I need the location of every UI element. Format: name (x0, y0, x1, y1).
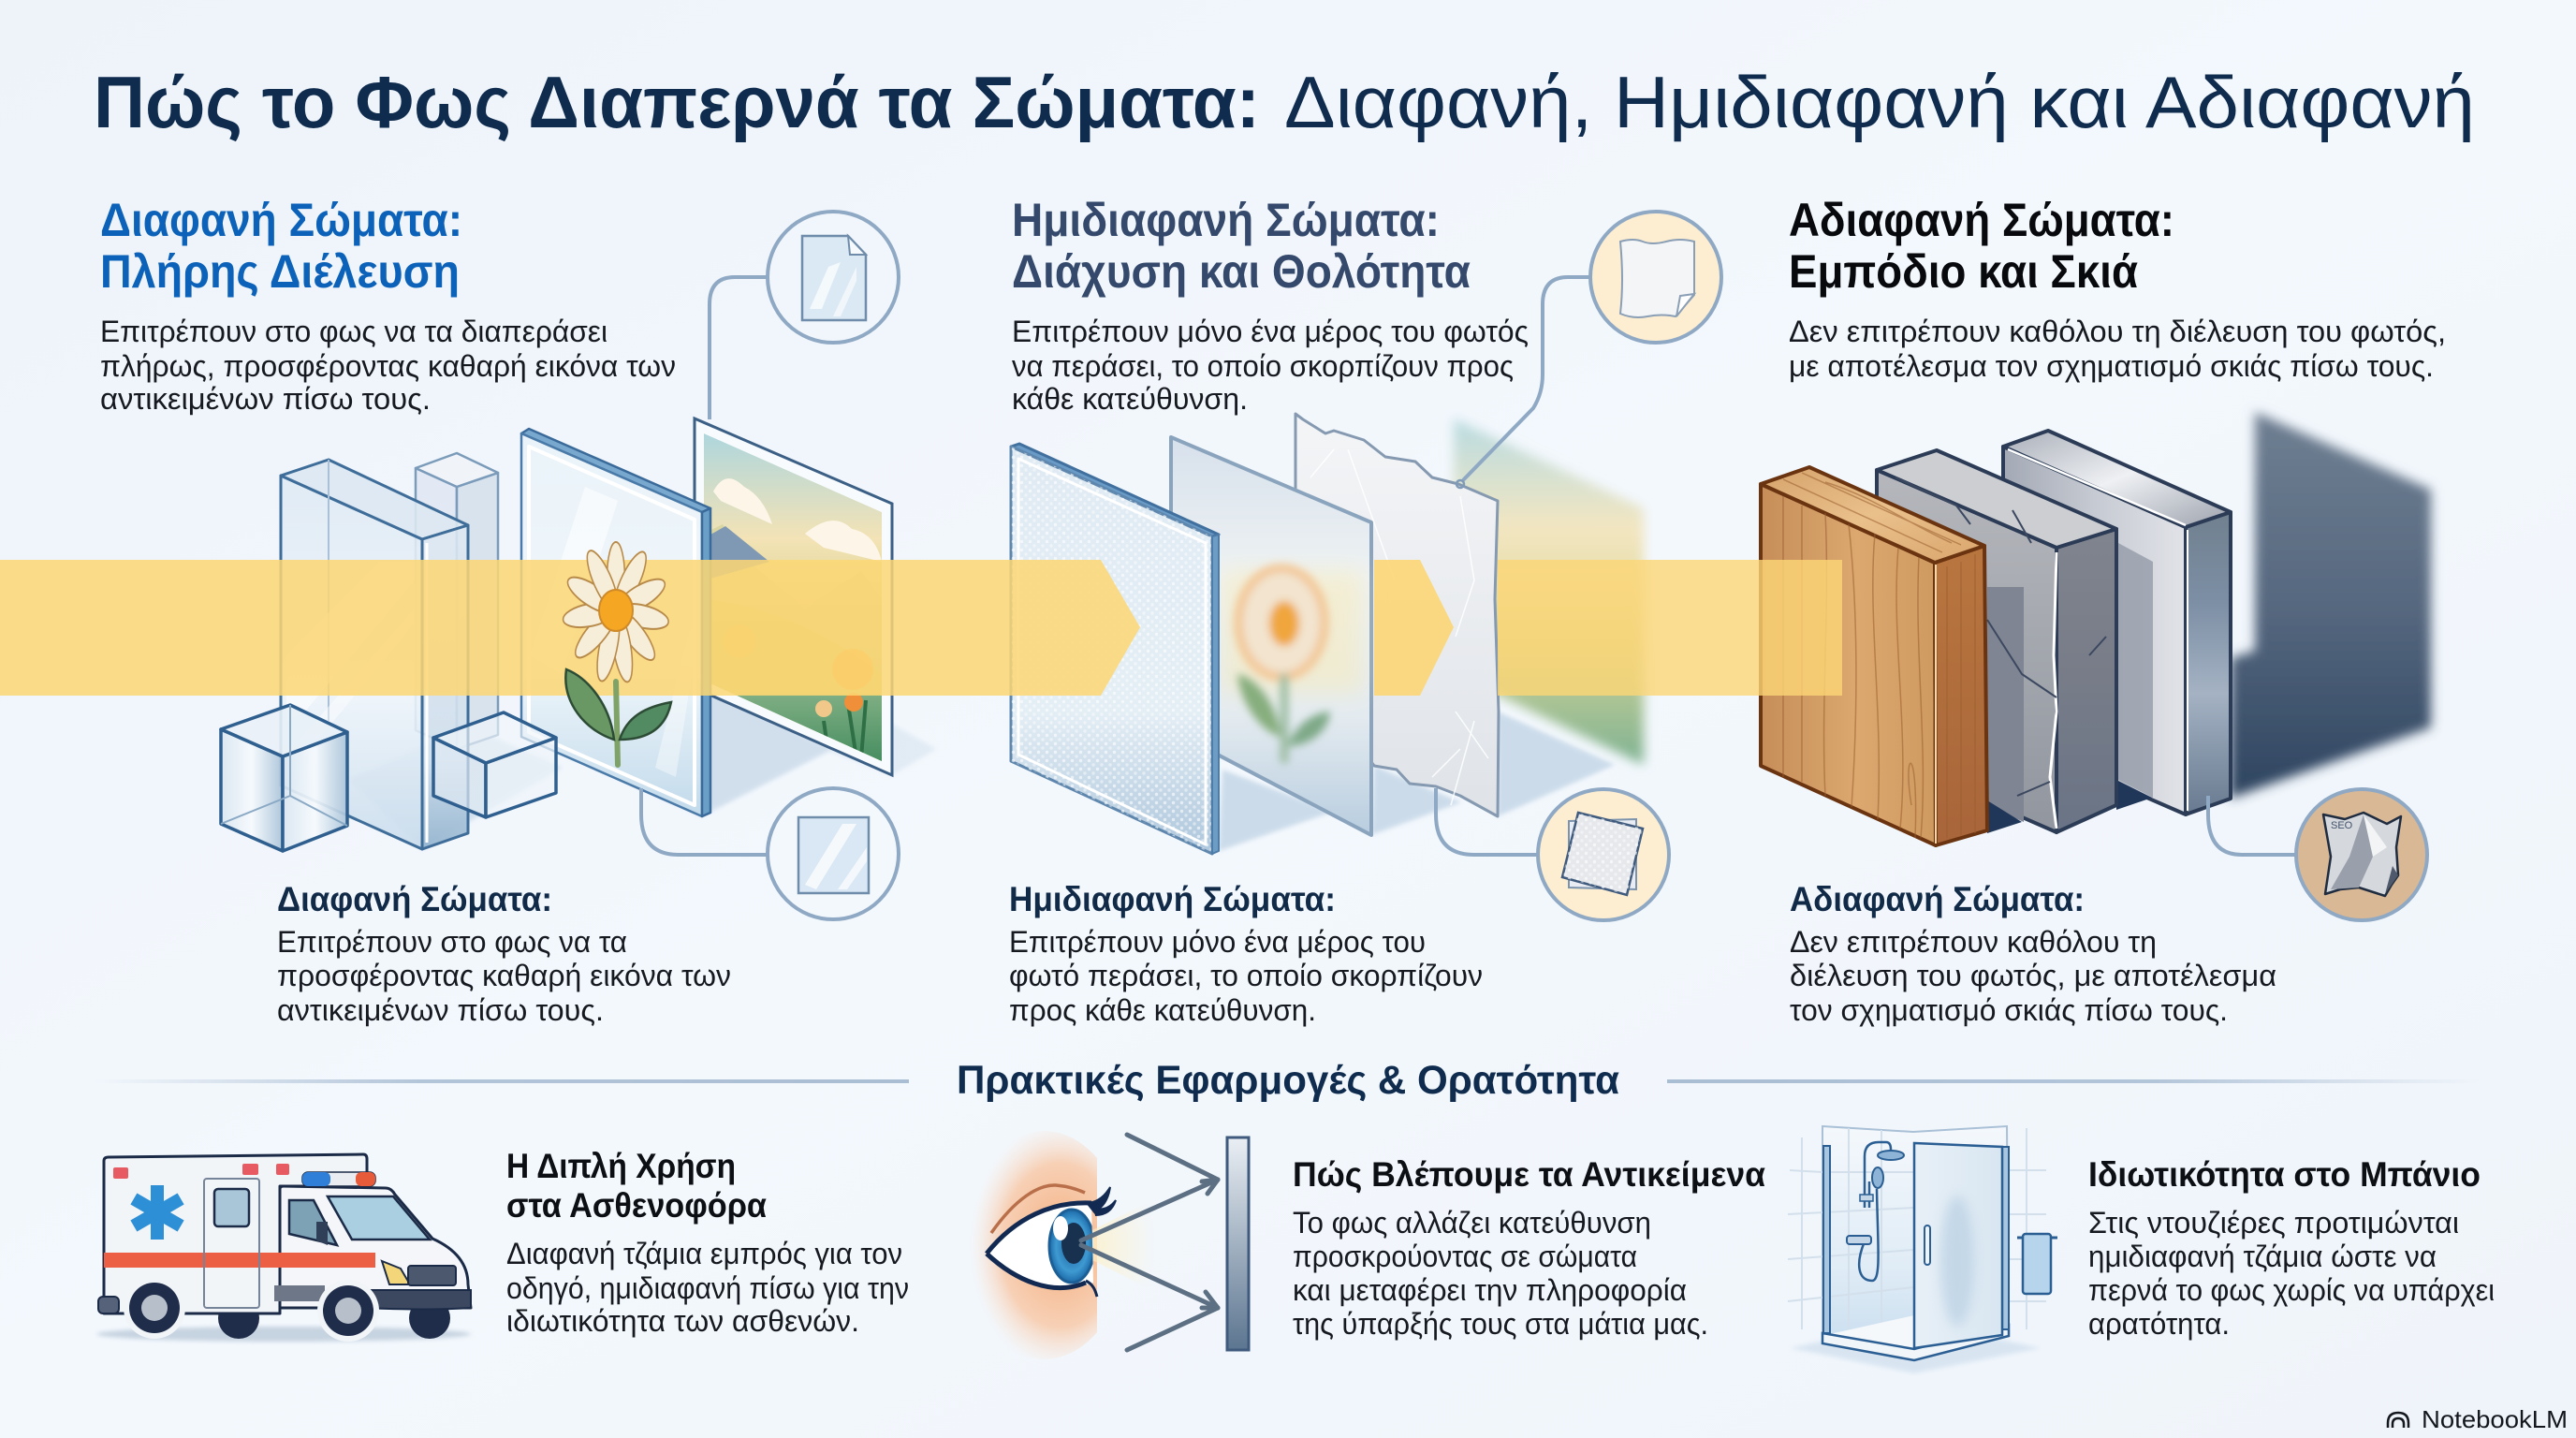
light beam: segment three (1498, 560, 1842, 696)
back prism (416, 453, 498, 749)
icon: crumpled foil, bottom right: SEO (2331, 820, 2353, 831)
floor shadows (1219, 712, 1615, 851)
text: how we see: προσκρούοντας σε σώματα (1293, 1240, 1637, 1273)
tall glass prism (281, 460, 468, 849)
floor shadow patch by wood (1987, 800, 2022, 833)
icon: ambulance (96, 1154, 471, 1342)
metal slab (2003, 431, 2231, 814)
text: ambulance application: Διαφανή τζάμια εμπρός για τον (506, 1237, 902, 1270)
caption: transparent: προσφέροντας καθαρή εικόνα των (277, 959, 731, 992)
text: bathroom privacy: περνά το φως χωρίς να υπάρχει (2088, 1273, 2495, 1307)
heading block: transparent bodies (100, 194, 676, 416)
text: how we see: της ύπαρξής τους στα μάτια μας. (1293, 1307, 1708, 1341)
heading block: translucent bodies: κάθε κατεύθυνση. (1012, 382, 1248, 416)
frosted pane two (1171, 437, 1371, 835)
framed landscape picture (695, 418, 892, 775)
floor shadows (348, 688, 936, 849)
heading block: transparent bodies: Διαφανή Σώματα: (100, 194, 462, 246)
text: bathroom privacy: Στις ντουζιέρες προτιμώνται (2088, 1206, 2459, 1240)
heading block: opaque bodies (1789, 194, 2446, 383)
caption: opaque: Δεν επιτρέπουν καθόλου τη (1790, 925, 2157, 959)
caption: opaque: τον σχηματισμό σκιάς πίσω τους. (1790, 993, 2228, 1027)
text: ambulance application: Η Διπλή Χρήση (506, 1147, 736, 1185)
frosted pane one (1011, 444, 1219, 854)
text: bathroom privacy: αρατότητα. (2088, 1307, 2230, 1341)
connector bottom (1436, 788, 1538, 855)
heading block: translucent bodies (1012, 194, 1529, 416)
caption: transparent: Διαφανή Σώματα: (277, 880, 552, 918)
torn paper sheet (1295, 414, 1499, 816)
heading block: translucent bodies: να περάσει, το οποίο σκορπίζουν προς (1012, 349, 1514, 383)
section heading with rules (94, 1058, 2481, 1103)
title: Διαφανή, Ημιδιαφανή και Αδιαφανή (1284, 61, 2475, 143)
caption: translucent: προς κάθε κατεύθυνση. (1009, 993, 1316, 1027)
heading block: translucent bodies: Διάχυση και Θολότητα (1012, 245, 1471, 298)
caption: transparent: αντικειμένων πίσω τους. (277, 993, 604, 1027)
heading block: transparent bodies: αντικειμένων πίσω τους. (100, 382, 431, 416)
title (94, 61, 2475, 143)
text: how we see (1293, 1155, 1765, 1341)
right small cube (433, 712, 556, 817)
icon: clear sheet, top left (768, 212, 899, 343)
cast shadow (2230, 412, 2431, 799)
heading block: translucent bodies: Ημιδιαφανή Σώματα: (1012, 194, 1440, 246)
heading block: opaque bodies: Εμπόδιο και Σκιά (1789, 245, 2138, 298)
heading block: opaque bodies: Δεν επιτρέπουν καθόλου τη διέλευση του φωτός, (1789, 315, 2446, 348)
light beam: segment two (1374, 560, 1454, 696)
flower on the clear pane (562, 542, 671, 765)
pin (1456, 480, 1464, 488)
connector top (710, 277, 768, 419)
glass pane with flower (521, 429, 710, 816)
caption: translucent: Ημιδιαφανή Σώματα: (1009, 880, 1336, 918)
heading block: transparent bodies: πλήρως, προσφέροντας καθαρή εικόνα των (100, 349, 676, 383)
icon: shower enclosure (1788, 1126, 2057, 1373)
caption: translucent: Επιτρέπουν μόνο ένα μέρος του (1009, 925, 1426, 959)
NotebookLM mark: NotebookLM (2422, 1405, 2568, 1433)
text: ambulance application (506, 1147, 909, 1338)
blurred landscape behind paper (1454, 418, 1644, 765)
heading block: opaque bodies: με αποτέλεσμα τον σχηματισμό σκιάς πίσω τους. (1789, 349, 2434, 383)
caption: opaque: διέλευση του φωτός, με αποτέλεσμα (1790, 959, 2276, 992)
connector (2208, 796, 2296, 855)
icon: crumpled foil, bottom right (2296, 789, 2427, 920)
left small cube (221, 705, 347, 851)
floor shadow patches (2116, 780, 2152, 810)
text: bathroom privacy: ημιδιαφανή τζάμια ώστε να (2088, 1240, 2437, 1273)
connector bottom (641, 788, 769, 855)
title: Πώς το Φως Διαπερνά τα Σώματα: (94, 61, 1260, 143)
text: how we see: Πώς Βλέπουμε τα Αντικείμενα (1293, 1155, 1765, 1194)
caption: opaque (1790, 880, 2276, 1027)
text: bathroom privacy: Ιδιωτικότητα στο Μπάνιο (2088, 1155, 2481, 1194)
stone slab (1877, 450, 2116, 832)
icon: eye with reflected rays (961, 1131, 1249, 1359)
caption: translucent (1009, 880, 1483, 1027)
connector top (1463, 277, 1590, 480)
text: bathroom privacy (2088, 1155, 2495, 1341)
caption: transparent (277, 880, 731, 1027)
heading block: transparent bodies: Πλήρης Διέλευση (100, 245, 460, 298)
caption: opaque: Αδιαφανή Σώματα: (1790, 880, 2085, 918)
heading block: transparent bodies: Επιτρέπουν στο φως να τα διαπεράσει (100, 315, 607, 348)
wood plank (1761, 467, 1987, 845)
heading block: translucent bodies: Επιτρέπουν μόνο ένα μέρος του φωτός (1012, 315, 1529, 348)
section heading with rules: Πρακτικές Εφαρμογές & Ορατότητα (957, 1058, 1619, 1103)
caption: transparent: Επιτρέπουν στο φως να τα (277, 925, 627, 959)
text: how we see: και μεταφέρει την πληροφορία (1293, 1273, 1687, 1307)
caption: translucent: φωτό περάσει, το οποίο σκορπίζουν (1009, 959, 1483, 992)
text: ambulance application: οδηγό, ημιδιαφανή πίσω για την (506, 1271, 909, 1305)
illustration: translucent objects (1011, 277, 1644, 855)
light beam: segment one (0, 560, 1140, 696)
icon: tissue paper, top middle (1590, 212, 1721, 343)
illustration: transparent objects (221, 277, 936, 855)
text: ambulance application: ιδιωτικότητα των ασθενών. (506, 1304, 859, 1338)
icon: frosted sheets, bottom middle (1538, 789, 1669, 920)
text: ambulance application: στα Ασθενοφόρα (506, 1186, 767, 1225)
text: how we see: Το φως αλλάζει κατεύθυνση (1293, 1206, 1651, 1240)
illustration: opaque objects (1761, 412, 2431, 855)
icon: clear pane, bottom left (768, 788, 899, 919)
heading block: opaque bodies: Αδιαφανή Σώματα: (1789, 194, 2174, 246)
